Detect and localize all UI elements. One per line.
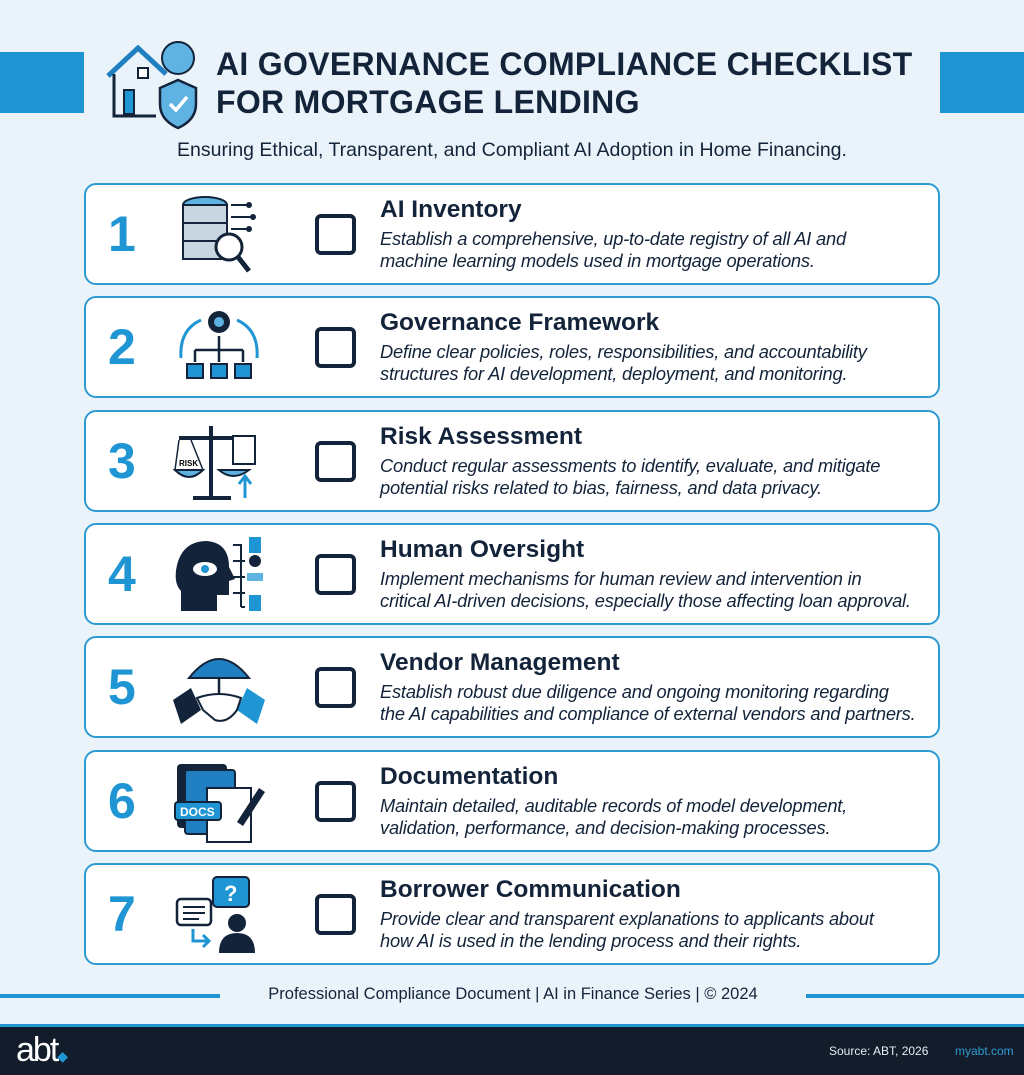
panel: 6 Documentation: validation, performance, and decision-making processes.: [380, 817, 830, 838]
panel: 2 Governance Framework: Define clear policies, roles, responsibilities, and accountability: [380, 341, 867, 362]
checkbox: [315, 894, 356, 935]
panel: 6 Documentation: [84, 750, 940, 852]
header icon: house brain shield: [106, 41, 198, 130]
panel: 5 Vendor Management: the AI capabilities and compliance of external vendors and partners.: [380, 703, 916, 724]
icon: scale: RISK: [179, 459, 198, 468]
checkbox: [315, 667, 356, 708]
panel: 3 Risk Assessment: Conduct regular assessments to identify, evaluate, and mitigate: [380, 455, 880, 476]
icon: docs folder pen: [174, 764, 265, 843]
footer line right: [806, 994, 1024, 998]
panel: 4 Human Oversight: 4: [108, 546, 136, 602]
checkbox: [315, 554, 356, 595]
icon: docs folder pen: DOCS: [180, 805, 215, 819]
icon: database search: [182, 196, 256, 272]
checkbox: [315, 441, 356, 482]
panel: 2 Governance Framework: Governance Framework: [380, 309, 659, 336]
icon: umbrella handshake: [173, 658, 265, 724]
icon: chat person: [176, 876, 255, 953]
panel: 4 Human Oversight: Implement mechanisms for human review and intervention in: [380, 568, 861, 589]
panel: 7 Borrower Communication: 7: [108, 886, 136, 942]
checkbox: [315, 214, 356, 255]
panel: 5 Vendor Management: Establish robust due diligence and ongoing monitoring regarding: [380, 681, 889, 702]
panel: 3 Risk Assessment: Risk Assessment: [380, 423, 582, 450]
panel: 2 Governance Framework: 2: [108, 319, 136, 375]
panel: 1 AI Inventory: [84, 183, 940, 285]
panel: 2 Governance Framework: structures for AI development, deployment, and monitoring.: [380, 363, 847, 384]
panel: 7 Borrower Communication: Provide clear and transparent explanations to applicants about: [380, 908, 874, 929]
panel: 5 Vendor Management: [84, 636, 940, 738]
header bar left: [0, 52, 84, 113]
footer line left: [0, 994, 220, 998]
icon: gear hierarchy: [179, 311, 259, 379]
website: myabt.com: [955, 1044, 1014, 1058]
panel: 1 AI Inventory: AI Inventory: [380, 196, 522, 223]
header bar right: [940, 52, 1024, 113]
icon: head eye: [176, 537, 263, 611]
icon: scale: [172, 426, 256, 500]
panel: 1 AI Inventory: 1: [108, 206, 136, 262]
panel: 6 Documentation: 6: [108, 773, 136, 829]
panel: 6 Documentation: Maintain detailed, auditable records of model development,: [380, 795, 847, 816]
panel: 5 Vendor Management: Vendor Management: [380, 649, 620, 676]
panel: 3 Risk Assessment: potential risks related to bias, fairness, and data privacy.: [380, 477, 822, 498]
panel: 2 Governance Framework: [84, 296, 940, 398]
title: AI GOVERNANCE COMPLIANCE CHECKLIST: [216, 46, 912, 82]
panel: 3 Risk Assessment: [84, 410, 940, 512]
panel: 7 Borrower Communication: Borrower Communication: [380, 876, 681, 903]
bottom band: [0, 1024, 1024, 1075]
panel: 6 Documentation: Documentation: [380, 763, 558, 790]
footer text: Professional Compliance Document | AI in Finance Series | © 2024: [268, 985, 758, 1003]
panel: 4 Human Oversight: Human Oversight: [380, 536, 584, 563]
checkbox: [315, 781, 356, 822]
panel: 5 Vendor Management: 5: [108, 659, 136, 715]
icon: chat person: ?: [224, 881, 237, 906]
panel: 3 Risk Assessment: 3: [108, 433, 136, 489]
title: [216, 46, 912, 120]
subtitle: Ensuring Ethical, Transparent, and Compliant AI Adoption in Home Financing.: [177, 139, 847, 161]
source text: Source: ABT, 2026: [829, 1044, 928, 1058]
checkbox: [315, 327, 356, 368]
panel: 4 Human Oversight: critical AI-driven decisions, especially those affecting loan approval.: [380, 590, 911, 611]
panel: 1 AI Inventory: machine learning models used in mortgage operations.: [380, 250, 815, 271]
panel: 1 AI Inventory: Establish a comprehensive, up-to-date registry of all AI and: [380, 228, 846, 249]
logo: abt: abt◆: [16, 1031, 66, 1069]
panel: 4 Human Oversight: [84, 523, 940, 625]
title: FOR MORTGAGE LENDING: [216, 84, 640, 120]
panel: 7 Borrower Communication: [84, 863, 940, 965]
panel: 7 Borrower Communication: how AI is used in the lending process and their rights.: [380, 930, 801, 951]
